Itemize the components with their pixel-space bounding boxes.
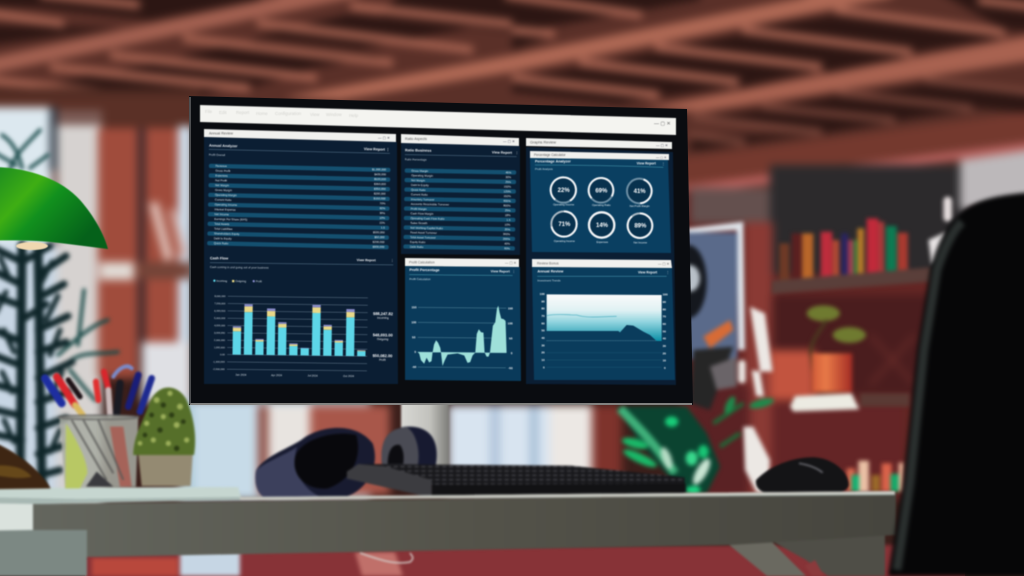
- chart: cash flow: 6,000,000: [214, 310, 226, 313]
- small potted shrub: [133, 388, 195, 486]
- chart: cash flow: 3,000,000: [214, 332, 226, 335]
- window title bar: Ratio Aspects: [405, 137, 427, 141]
- chart: cash flow: 8,000,000: [214, 295, 226, 298]
- table: ratio business: Net Working Capital Ratio: [410, 226, 443, 230]
- office chair: [888, 191, 1024, 576]
- chart: annual review area: 70: [663, 315, 666, 319]
- chart: annual review area: 40: [663, 337, 666, 341]
- chart: annual review area: 60: [541, 321, 545, 325]
- table: ratio business: [403, 148, 519, 251]
- table: ratio business: 800%: [503, 204, 511, 208]
- table: annual analyzer: Expenses: [215, 173, 228, 178]
- gauge 14%: Expenses: [596, 240, 609, 244]
- table: annual analyzer: Revenue: [215, 164, 227, 168]
- panel: percentage calculator: Profit Analysis: [535, 167, 553, 171]
- chart: profit percentage: ⋮: [512, 270, 515, 274]
- right brick wall: [680, 146, 1024, 500]
- table: ratio business: 600%: [504, 199, 511, 203]
- left ear cup: [255, 428, 375, 497]
- table: ratio business: Net Margin: [411, 178, 425, 183]
- panel: review bonus: Review Bonus: [537, 262, 559, 266]
- menu bar: Configuration: [275, 111, 302, 116]
- panel: percentage calculator: [530, 151, 671, 253]
- table: annual analyzer: Gross Profit: [215, 169, 231, 173]
- table: ratio business: Quick Ratio: [411, 188, 426, 192]
- desk right leg: [728, 510, 885, 576]
- table: annual analyzer: Operating Income: [215, 202, 238, 207]
- cup: [59, 416, 138, 488]
- chart: annual review area: 90: [663, 300, 666, 304]
- gauge 69%: [584, 173, 618, 208]
- month labels: Jul 2024: [308, 374, 318, 378]
- panel: review bonus: — ▢ ✕: [658, 262, 669, 266]
- panel: annual review: [204, 129, 398, 384]
- chart: annual review area: ⋮: [666, 271, 669, 275]
- headset: [255, 427, 437, 497]
- table: ratio business: 20%: [505, 227, 511, 232]
- table: annual analyzer: 60%: [380, 206, 386, 210]
- chart: annual review area: 80: [541, 307, 545, 311]
- table: ratio business: Cash Flow Margin: [411, 211, 434, 216]
- chart: profit percentage: 150: [508, 307, 513, 311]
- panel: profit calculation: [405, 258, 521, 381]
- paper tray: [0, 487, 241, 499]
- table: annual analyzer: 1.5: [381, 226, 385, 230]
- menu bar: Home: [256, 111, 268, 116]
- table: annual analyzer: Net Income: [214, 212, 229, 216]
- table: ratio business: Current Ratio: [411, 192, 428, 197]
- chart: cash flow: 5,000,000: [214, 317, 226, 320]
- chart: cash flow: ⋮: [391, 259, 394, 263]
- gauge 89%: 89%: [634, 224, 647, 230]
- table: annual analyzer: Debt to Equity: [214, 236, 232, 241]
- table: annual analyzer: Total Assets: [214, 222, 230, 226]
- mid-ground props: [0, 130, 965, 576]
- table: annual analyzer: Interest Expense: [215, 207, 236, 212]
- table: annual analyzer: $200,000: [374, 192, 386, 196]
- chart: profit percentage: View Report: [491, 269, 511, 274]
- totals: Outgoing: [377, 337, 389, 341]
- dark ceiling slots: [0, 0, 1024, 150]
- table: ratio business: 25%: [505, 180, 512, 184]
- keyboard: [347, 464, 686, 497]
- legend: Profit: [256, 279, 262, 283]
- table: ratio business: 10%: [505, 223, 511, 227]
- panel: review bonus: [532, 259, 675, 380]
- window title bar: — ▢ ✕: [378, 136, 390, 140]
- table: ratio business: 40%: [504, 242, 511, 246]
- table: annual analyzer: $350,000: [374, 182, 386, 186]
- table: annual analyzer: $400,000: [374, 172, 387, 177]
- table: ratio business: Operating Cash Flow Ratio: [410, 216, 445, 221]
- chart: annual review area: 100: [663, 293, 668, 297]
- menu bar: Edit: [219, 110, 227, 115]
- table: annual analyzer: 10%: [379, 216, 386, 220]
- gauge 71%: 71%: [558, 222, 571, 228]
- table: annual analyzer: Quick Ratio: [214, 241, 229, 245]
- desk: [0, 487, 896, 576]
- potted plant on shelf: [790, 305, 910, 412]
- menu bar: View: [310, 112, 320, 117]
- table: annual analyzer: $200,000: [373, 240, 385, 244]
- gauge 14%: [589, 212, 614, 244]
- table: annual analyzer: $500,000: [373, 230, 385, 234]
- table: annual analyzer: 15%: [379, 221, 385, 225]
- window title bar: Profit Calculation: [409, 260, 435, 264]
- panel: graphs review: [526, 138, 676, 385]
- menu bar: Report: [236, 110, 250, 115]
- window title bar: Graphs Review: [530, 140, 556, 144]
- table: annual analyzer: Profit Overall: [209, 153, 226, 157]
- gauge 71%: [551, 211, 577, 243]
- chart: profit percentage: Profit Percentage: [409, 268, 440, 272]
- chart: annual review area: 0: [664, 366, 666, 370]
- chart: annual review area: 100: [540, 292, 545, 296]
- green desk lamp: [0, 167, 108, 250]
- chart: profit percentage: [408, 268, 515, 370]
- window title bar: — ▢ ✕: [505, 261, 516, 265]
- panel: percentage calculator: — ▢ ✕: [656, 156, 667, 160]
- gauge 41%: 41%: [634, 189, 646, 195]
- chart: annual review area: 80: [663, 307, 666, 311]
- gauge 69%: Operating Ratio: [592, 203, 611, 207]
- panel: percentage calculator: View Report: [637, 162, 657, 166]
- table: annual analyzer: [207, 143, 391, 249]
- thick ceiling beams: [0, 0, 400, 78]
- chart: cash flow: [209, 256, 394, 379]
- table: ratio business: View Report: [492, 151, 513, 155]
- chart: profit percentage: 50: [509, 337, 513, 341]
- gauge 89%: [628, 213, 652, 245]
- window title bar: [204, 129, 396, 142]
- chart: profit percentage: 50: [412, 335, 416, 339]
- chart: cash flow: 1,000,000: [214, 346, 226, 350]
- table: ratio business: 18%: [505, 213, 511, 217]
- cable under desk: [360, 553, 413, 563]
- mid windows below monitor: [180, 400, 622, 500]
- chart: annual review area: 50: [663, 329, 666, 333]
- legend: Outgoing: [235, 279, 247, 283]
- table: ratio business: Debt Ratio: [410, 245, 424, 249]
- window title bar: [526, 138, 672, 149]
- menu bar: File: [205, 109, 213, 114]
- bars: [232, 304, 366, 356]
- chart: profit percentage: -50: [508, 366, 513, 370]
- chart: annual review area: 60: [663, 322, 666, 326]
- totals: $48,693.00: [373, 332, 394, 338]
- right ear cup: [381, 427, 437, 465]
- totals: [372, 311, 394, 362]
- gauge 41%: [624, 175, 655, 208]
- foreground desk objects: [0, 366, 896, 576]
- table: annual analyzer: Current Ratio: [215, 198, 232, 202]
- white wall streaks: [738, 307, 773, 493]
- gauge 22%: 22%: [558, 188, 570, 194]
- gauge 69%: 69%: [595, 188, 608, 194]
- table: ratio business: Total Asset Turnover: [410, 235, 436, 240]
- small books behind mouse: [847, 461, 904, 492]
- menu bar: Window: [326, 112, 342, 117]
- table: annual analyzer: $150,000: [374, 196, 386, 201]
- computer mouse: [756, 457, 849, 493]
- grid and axis: [227, 296, 368, 371]
- chart: annual review area: Investment Trends: [537, 279, 561, 283]
- gauge 22%: [545, 172, 581, 208]
- window title bar: [401, 134, 519, 146]
- table: ratio business: Inventory Turnover: [411, 197, 434, 202]
- gauge 71%: Operating Income: [554, 239, 575, 243]
- monitor stand: [401, 400, 449, 466]
- chart: annual review area: [537, 270, 669, 370]
- totals: Incoming: [377, 316, 389, 320]
- table: ratio business: Debt to Equity: [411, 183, 429, 187]
- totals: $50,082.00: [372, 353, 393, 358]
- under-desk floor base: [85, 560, 965, 576]
- table: ratio business: 30%: [505, 175, 512, 179]
- table: ratio business: Ratio Business: [405, 148, 431, 153]
- menu bar: [200, 105, 676, 135]
- chart: annual review area: 70: [541, 314, 545, 318]
- bookshelf with books: [772, 197, 952, 294]
- table: ratio business: Sales Growth: [410, 221, 428, 225]
- chart: profit percentage: 150: [411, 305, 417, 309]
- table: annual analyzer: 30%: [379, 211, 386, 215]
- window title bar: — ▢ ✕: [656, 144, 668, 148]
- table: ratio business: 45%: [506, 170, 512, 175]
- wall-top beam: [680, 108, 1024, 186]
- gauge 14%: 14%: [596, 223, 609, 229]
- totals: Profit: [379, 358, 386, 362]
- monitor bezel: [189, 96, 693, 405]
- panel: percentage calculator: Percentage Calculator: [534, 153, 566, 157]
- pens: [45, 366, 152, 416]
- chart: cash flow: -2,000,000: [213, 368, 225, 371]
- table: annual analyzer: Operating Margin: [215, 193, 237, 197]
- table: ratio business: 150%: [504, 194, 511, 198]
- framed painting: [670, 222, 745, 410]
- table: ratio business: 1.5: [506, 218, 511, 222]
- table: annual analyzer: $350,000: [374, 187, 386, 191]
- brown object on desk: [0, 440, 51, 489]
- table: ratio business: Accounts Receivable Turnover: [411, 202, 449, 207]
- chart: annual review area: 40: [541, 336, 545, 340]
- month labels: Oct 2024: [343, 374, 354, 378]
- chart: annual review area: 10: [541, 358, 545, 362]
- desk corner: [0, 502, 33, 531]
- table: annual analyzer: Total Liabilities: [214, 227, 233, 231]
- table: ratio business: Equity Ratio: [410, 240, 426, 244]
- pen holder: [45, 366, 152, 488]
- chart: profit percentage: 0: [414, 350, 416, 354]
- table: ratio business: 150%: [504, 185, 512, 189]
- chart: profit percentage: Profit Calculation: [409, 277, 431, 281]
- chart: cash flow: View Report: [357, 258, 377, 262]
- table: annual analyzer: Earnings Per Share (EPS): [214, 217, 247, 222]
- gauge 41%: Net Profit Margin: [630, 204, 650, 208]
- chart: annual review area: View Report: [638, 271, 658, 275]
- chart: cash flow: -1,000,000: [213, 361, 225, 364]
- chart: profit percentage: 100: [508, 322, 513, 326]
- chart: annual review area: 30: [541, 343, 545, 347]
- table: annual analyzer: $900,000: [373, 245, 385, 249]
- chart: annual review area: Annual Review: [537, 270, 563, 274]
- month labels: [235, 373, 354, 378]
- table: annual analyzer: Net Margin: [215, 183, 229, 187]
- window title bar: [405, 258, 519, 267]
- desk front face: [33, 494, 896, 557]
- chart: cash flow: Cash Flow: [210, 256, 228, 261]
- chart: cash flow: 4,000,000: [214, 324, 226, 328]
- chart: profit percentage: 0: [511, 351, 513, 355]
- chart: annual review area: 30: [663, 344, 666, 348]
- chart: cash flow: Cash coming in and going out of your business: [210, 265, 269, 270]
- chart: cash flow: 7,000,000: [214, 302, 226, 306]
- chart: annual review area: 50: [541, 329, 545, 333]
- table: annual analyzer: $50,000: [374, 235, 385, 239]
- chart: profit percentage: 100: [411, 320, 417, 324]
- desk top surface: [0, 491, 895, 504]
- table: annual analyzer: Net Profit: [215, 178, 227, 183]
- green plant behind desk: [617, 395, 775, 494]
- chart: annual review area: 90: [541, 299, 545, 303]
- legend: [213, 279, 262, 283]
- chart: annual review area: 0: [543, 365, 545, 369]
- table: ratio business: 120%: [504, 189, 511, 194]
- chart: cash flow: 2,000,000: [214, 339, 226, 342]
- legend: Incoming: [216, 279, 228, 283]
- dark green plant on left: [0, 130, 118, 490]
- menu bar: — ▢ ✕: [654, 121, 671, 127]
- table: ratio business: Operating Margin: [411, 173, 434, 178]
- month labels: Jan 2024: [235, 373, 247, 377]
- table: ratio business: 300%: [503, 232, 511, 236]
- gauge 22%: Operating Income: [553, 203, 575, 207]
- panel: percentage calculator: ⋮: [662, 162, 665, 166]
- thin ceiling beams: [0, 0, 1024, 100]
- table: ratio business: Gross Margin: [411, 169, 429, 173]
- window title bar: Annual Review: [209, 132, 233, 136]
- table: annual analyzer: $500,000: [374, 177, 386, 181]
- ceiling: [0, 0, 1024, 220]
- screen content: [200, 105, 676, 385]
- chart: annual review area: 20: [663, 351, 666, 355]
- chart: annual review area: 20: [541, 351, 545, 355]
- chart: cash flow: 0.00: [220, 353, 225, 357]
- panel: percentage calculator: Percentage Analyzer: [535, 160, 571, 164]
- month labels: Apr 2024: [271, 373, 283, 377]
- table: ratio business: Ratio Percentage: [405, 157, 427, 162]
- table: ratio business: 60%: [504, 246, 510, 251]
- table: ratio business: 200%: [503, 237, 511, 241]
- chart: annual review area: 10: [663, 359, 666, 363]
- table: annual analyzer: Shareholders Equity: [214, 231, 240, 236]
- table: ratio business: ⋮: [515, 151, 519, 155]
- table: ratio business: Profit Margin: [411, 207, 427, 211]
- under-desk floor: [85, 545, 965, 576]
- table: annual analyzer: $1,000,000: [372, 167, 387, 172]
- table: ratio business: 25%: [505, 208, 511, 213]
- desk left leg: [0, 530, 87, 576]
- table: ratio business: Fixed Asset Turnover: [410, 230, 437, 235]
- gauge 89%: Net Income: [634, 241, 648, 245]
- table: annual analyzer: Gross Margin: [215, 188, 232, 192]
- menu bar: Help: [349, 113, 359, 118]
- table: annual analyzer: Annual Analyzer: [209, 144, 238, 148]
- totals: $88,247.82: [373, 311, 394, 316]
- window title bar: — ▢ ✕: [503, 140, 515, 144]
- table: annual analyzer: View Report ⋮: [364, 146, 390, 153]
- chart: profit percentage: -50: [412, 365, 417, 369]
- left window and brick wall: [0, 95, 200, 520]
- table: annual analyzer: 70%: [380, 201, 386, 206]
- panel: ratio aspects: [401, 134, 520, 255]
